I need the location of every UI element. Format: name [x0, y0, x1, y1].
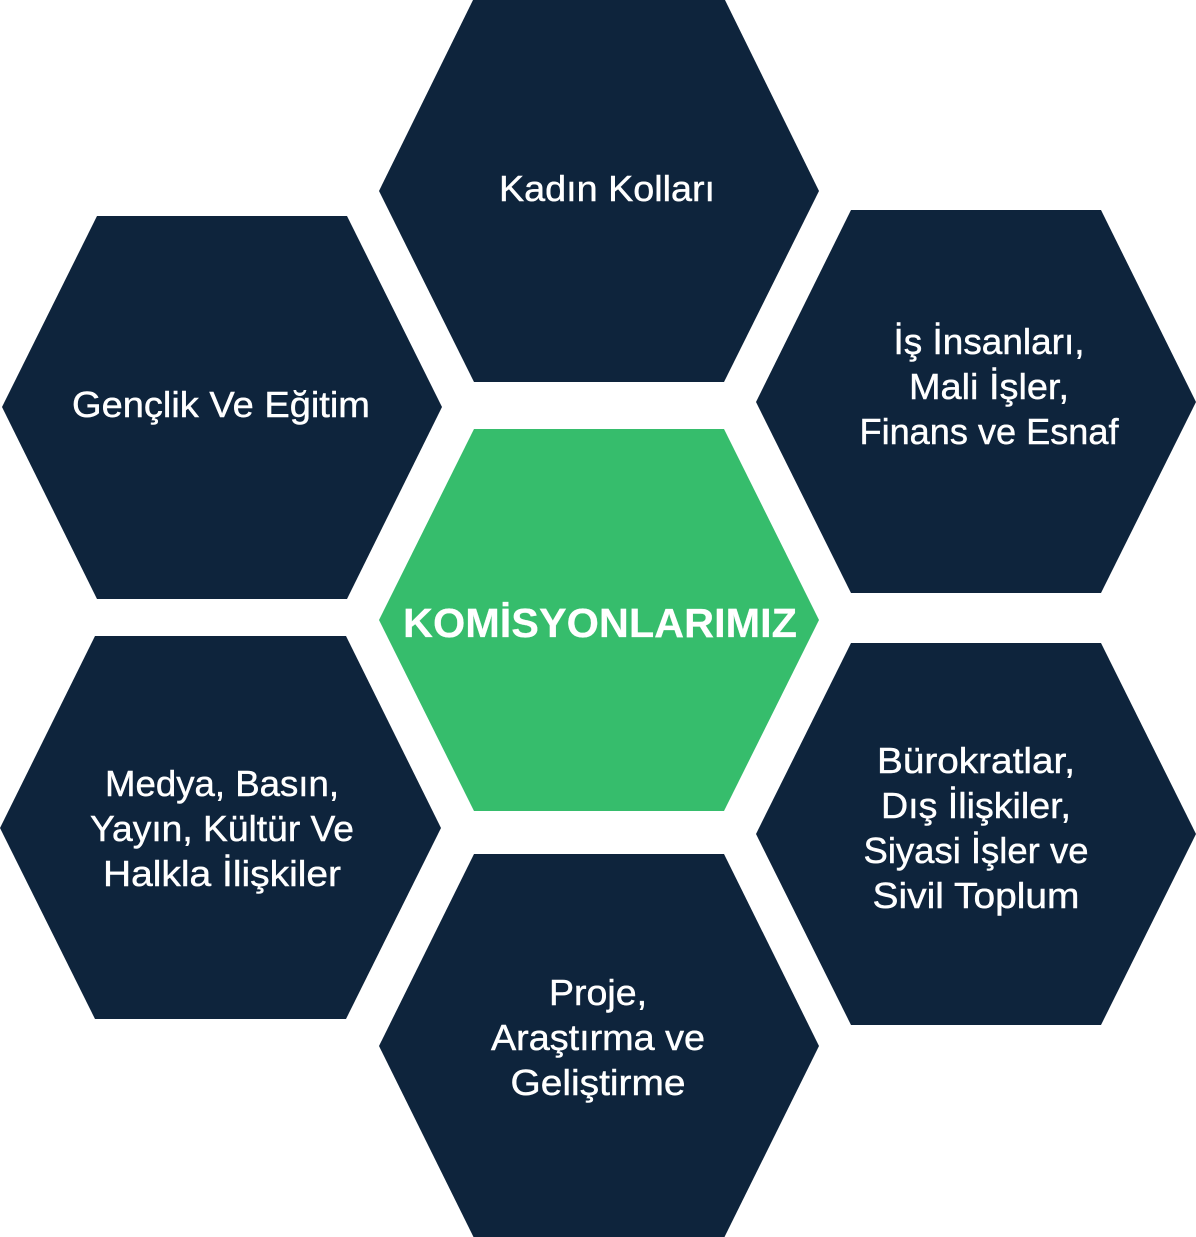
hexagon: İş İnsanları, Mali İşler, Finans ve Esnaf — [756, 210, 1196, 593]
hexagon: İş İnsanları, Mali İşler, Finans ve Esnaf: Mali İşler, — [909, 366, 1069, 407]
hexagon: Medya, Basın, Yayın, Kültür Ve Halkla İlişkiler: Halkla İlişkiler — [103, 853, 341, 894]
hexagon: İş İnsanları, Mali İşler, Finans ve Esnaf: İş İnsanları, — [894, 321, 1084, 362]
hexagon: Proje, Araştırma ve Geliştirme: Proje, — [549, 972, 647, 1013]
hexagon: Proje, Araştırma ve Geliştirme — [379, 854, 819, 1237]
center hexagon: Komisyonlarımız — [379, 429, 819, 811]
center hexagon: Komisyonlarımız: KOMİSYONLARIMIZ — [403, 600, 797, 646]
hexagon: Medya, Basın, Yayın, Kültür Ve Halkla İlişkiler: Yayın, Kültür Ve — [90, 808, 354, 849]
hexagon: Bürokratlar, Dış İlişkiler, Siyasi İşler ve Sivil Toplum: Dış İlişkiler, — [881, 785, 1071, 826]
hexagon: İş İnsanları, Mali İşler, Finans ve Esnaf: Finans ve Esnaf — [860, 411, 1119, 452]
hexagon: Bürokratlar, Dış İlişkiler, Siyasi İşler ve Sivil Toplum: Siyasi İşler ve — [864, 830, 1088, 871]
hexagon: Kadın Kolları: Kadın Kolları — [499, 168, 715, 209]
hexagon: Proje, Araştırma ve Geliştirme: Geliştirme — [510, 1062, 686, 1103]
hexagon: Proje, Araştırma ve Geliştirme: Araştırma ve — [491, 1017, 705, 1058]
hexagon: Medya, Basın, Yayın, Kültür Ve Halkla İlişkiler: Medya, Basın, — [105, 763, 339, 804]
hexagon: Medya, Basın, Yayın, Kültür Ve Halkla İlişkiler — [0, 636, 441, 1019]
hexagon: Bürokratlar, Dış İlişkiler, Siyasi İşler ve Sivil Toplum: Bürokratlar, — [877, 740, 1075, 781]
hexagon: Gençlik Ve Eğitim — [2, 216, 442, 599]
hexagon: Bürokratlar, Dış İlişkiler, Siyasi İşler ve Sivil Toplum — [756, 643, 1196, 1025]
hexagon: Kadın Kolları — [379, 0, 819, 382]
hexagon: Gençlik Ve Eğitim: Gençlik Ve Eğitim — [72, 384, 370, 425]
hexagon: Bürokratlar, Dış İlişkiler, Siyasi İşler ve Sivil Toplum: Sivil Toplum — [872, 875, 1080, 916]
